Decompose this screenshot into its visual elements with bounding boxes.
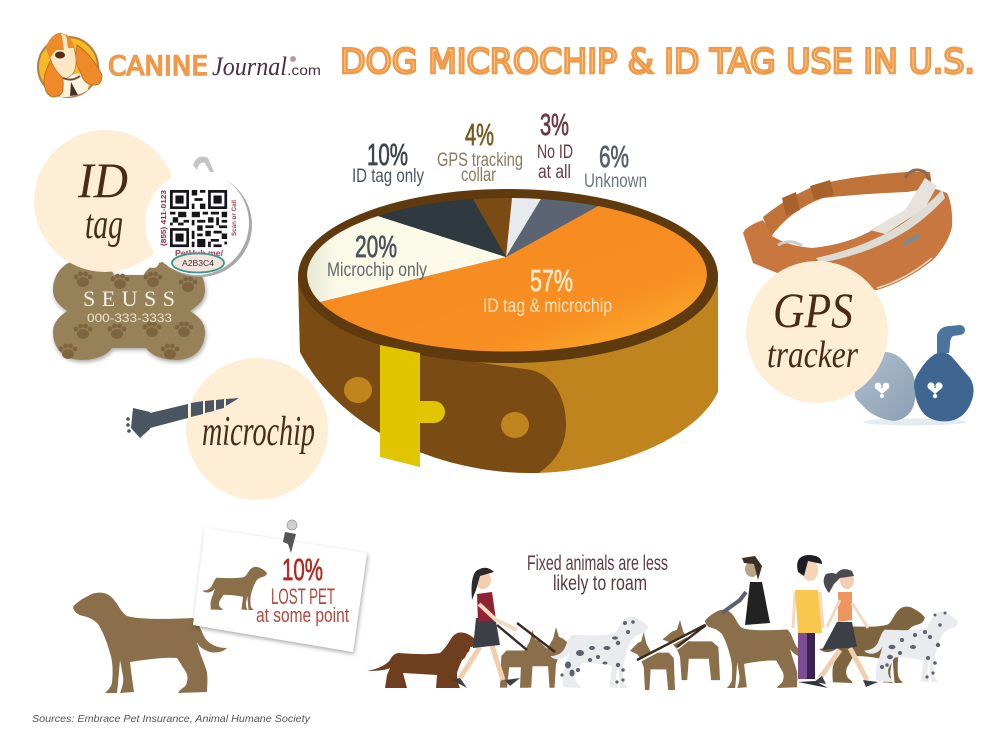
icon: QR pet tag: PetHub.me/ — [175, 249, 224, 258]
pointy eared dogs right pair — [630, 620, 720, 690]
pie slice: ID tag only 10% — [378, 199, 506, 257]
label: 10% ID tag only — [352, 137, 424, 187]
text: fixed animals: likely to roam — [553, 572, 647, 595]
note paper — [193, 528, 367, 652]
icon: blue tracker — [914, 325, 974, 421]
note text — [256, 552, 349, 627]
hole: left — [344, 377, 372, 403]
pie slice: no ID 3% — [506, 198, 541, 257]
icon: QR pet tag: (855) 411-0123 — [161, 190, 168, 246]
label: 10% ID tag only: 10% — [367, 137, 408, 172]
label: 20% Microchip only — [327, 229, 427, 281]
badge: GPS tracker — [746, 261, 888, 403]
hole: right — [501, 412, 529, 438]
collar strap and tongue — [298, 277, 566, 473]
panel: microchip — [126, 358, 328, 500]
icon: basset hound badge — [38, 33, 102, 97]
icon: bone ID tag: 000-333-3333 — [87, 311, 172, 325]
icon: push pin — [283, 520, 297, 553]
badge: ID tag: tag — [85, 202, 123, 248]
label: 57% ID tag and microchip: ID tag & microchip — [483, 296, 612, 317]
leashes: woman — [497, 623, 555, 652]
icon: small dog — [202, 567, 267, 610]
dalmatian right — [864, 612, 958, 682]
wordmark — [108, 51, 321, 82]
dachshund — [367, 632, 478, 688]
large brown dog with leash — [705, 610, 811, 688]
pie slice: GPS tracking collar 4% — [473, 198, 512, 257]
panel: GPS tracker — [743, 170, 974, 426]
label: 20% Microchip only: 20% — [355, 229, 397, 264]
pie slice: microchip only 20% — [307, 216, 506, 302]
label: 6% Unknown — [584, 139, 647, 192]
icon: GPS collar — [743, 170, 952, 290]
icon: large brown dog — [73, 593, 227, 693]
label: 20% Microchip only: Microchip only — [327, 260, 427, 281]
leashes: man — [637, 625, 706, 662]
chart: collar pie — [290, 107, 718, 480]
text: fixed animals — [527, 552, 668, 595]
text: fixed animals: Fixed animals are less — [527, 552, 668, 575]
logo: Canine Journal — [38, 33, 321, 97]
person: woman in orange — [814, 569, 878, 687]
title: DOG MICROCHIP & ID TAG USE IN U.S. — [340, 42, 975, 82]
rear brown dog — [819, 607, 925, 683]
label: 3% No ID at all — [537, 107, 573, 183]
illustration: people walking dogs — [367, 555, 958, 690]
badge: ID tag — [34, 130, 176, 272]
icon: bone ID tag — [53, 260, 205, 360]
sources: Sources: Embrace Pet Insurance, Animal Humane Society — [32, 713, 311, 725]
icon: microchip syringe — [126, 398, 239, 438]
note text: 10% — [282, 552, 323, 587]
collar body — [298, 276, 718, 473]
label: 4% GPS tracking collar: 4% — [465, 117, 494, 152]
label: 4% GPS tracking collar — [437, 117, 523, 186]
icon: bone ID tag: SEUSS — [83, 286, 175, 311]
person: man with glasses — [722, 556, 770, 625]
label: 4% GPS tracking collar: collar — [461, 165, 497, 186]
label: 10% ID tag only: ID tag only — [352, 166, 424, 187]
label: 4% GPS tracking collar: GPS tracking — [437, 150, 523, 171]
wordmark: Journal — [212, 52, 287, 81]
label: 6% Unknown: 6% — [599, 139, 629, 174]
collar rim — [298, 189, 718, 363]
icon: QR pet tag: Scan or Call — [232, 200, 238, 236]
note text: LOST PET — [271, 584, 335, 609]
pie slice: unknown 6% — [506, 199, 598, 257]
wordmark: .com — [287, 62, 321, 78]
label: 3% No ID at all: at all — [538, 162, 571, 183]
label: 6% Unknown: Unknown — [584, 171, 647, 192]
person: woman in red — [452, 568, 520, 688]
callout: lost pet note — [193, 520, 367, 652]
pointy eared dogs left pair — [500, 627, 572, 688]
label: 3% No ID at all: No ID — [537, 142, 573, 163]
icon: grey tracker — [855, 352, 967, 426]
panel: ID tag — [34, 130, 252, 360]
label: 3% No ID at all: 3% — [540, 107, 569, 142]
badge: microchip: microchip — [202, 409, 315, 455]
QR code — [170, 190, 227, 247]
label: 57% ID tag and microchip: 57% — [530, 263, 573, 298]
wordmark: CANINE — [108, 51, 208, 82]
label: 57% ID tag and microchip — [483, 263, 612, 317]
badge: ID tag: ID — [77, 152, 128, 208]
badge: microchip — [186, 358, 328, 500]
badge: GPS tracker: tracker — [767, 334, 858, 376]
pie slice: ID tag and microchip 57% — [320, 206, 707, 352]
icon: QR pet tag: A2B3C4 — [182, 259, 215, 268]
icon: QR pet tag — [145, 157, 252, 277]
note text: at some point — [256, 605, 349, 627]
person: man in yellow — [793, 555, 828, 688]
buckle — [380, 345, 445, 467]
dalmatian left — [550, 617, 648, 688]
badge: GPS tracker: GPS — [773, 282, 853, 338]
